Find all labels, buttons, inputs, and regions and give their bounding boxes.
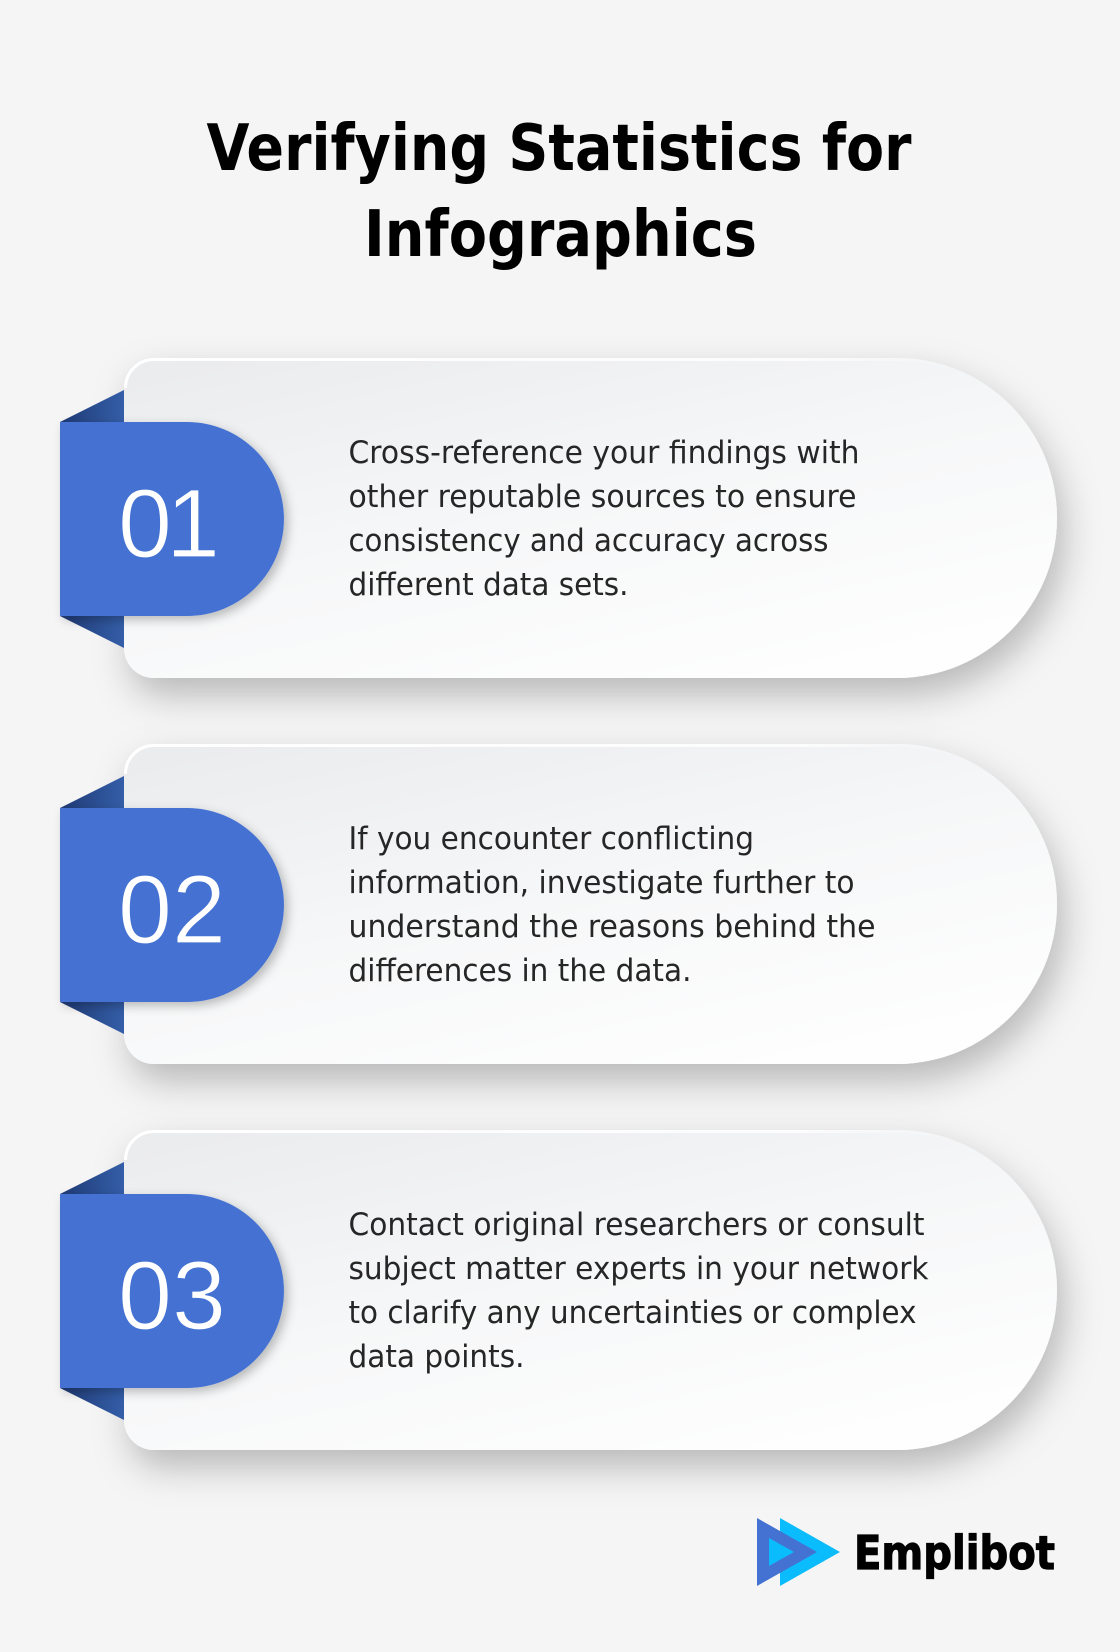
step text: information, investigate further to [348,865,854,901]
ribbon fold top [60,390,124,422]
panel: step 02 [60,744,1057,1064]
step text [348,821,876,989]
ribbon fold top [60,1162,124,1194]
step text [348,1207,929,1375]
logo: Emplibot [757,1518,1055,1586]
icon: play triangles [757,1518,840,1586]
ribbon fold bottom [60,1388,124,1420]
number badge: 01 [118,469,220,578]
wordmark: Emplibot [854,1526,1055,1580]
number badge [60,422,284,616]
card background [124,358,1057,678]
ribbon fold bottom [60,616,124,648]
panel: step 03 [60,1130,1057,1450]
step text: Cross-reference your findings with [348,435,860,471]
number badge [60,808,284,1002]
number badge: 02 [118,855,226,964]
step text: consistency and accuracy across [348,523,828,559]
step text: If you encounter conflicting [348,821,754,857]
step text: data points. [348,1339,524,1375]
title: Infographics [364,198,757,272]
ribbon fold top [60,776,124,808]
title: Verifying Statistics for [206,112,912,186]
number badge: 03 [118,1241,226,1350]
title [206,112,912,272]
card background [124,1130,1057,1450]
panel: step 01 [60,358,1057,678]
step text: differences in the data. [348,953,692,989]
step text: different data sets. [348,567,628,603]
step text: to clarify any uncertainties or complex [348,1295,916,1331]
ribbon fold bottom [60,1002,124,1034]
step text: understand the reasons behind the [348,909,876,945]
step text: other reputable sources to ensure [348,479,856,515]
step text [348,435,860,603]
step text: Contact original researchers or consult [348,1207,924,1243]
step text: subject matter experts in your network [348,1251,929,1287]
card background [124,744,1057,1064]
number badge [60,1194,284,1388]
